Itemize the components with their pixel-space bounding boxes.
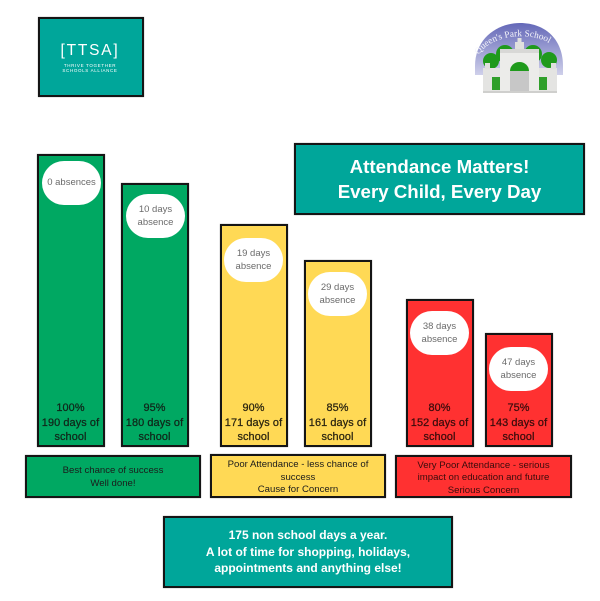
absence pill: [42, 160, 101, 204]
callout: non school days: [163, 516, 453, 588]
attendance figure: school: [502, 431, 535, 443]
logo: TTSA: [38, 17, 144, 97]
legend text: success: [281, 472, 315, 483]
absence pill: absence: [236, 260, 271, 272]
callout text: [206, 528, 410, 575]
bar: 90% attendance: [220, 224, 288, 447]
attendance figure: 161 days of: [309, 417, 366, 429]
absence pill: 47 days: [502, 356, 535, 368]
attendance figure: school: [54, 431, 87, 443]
absence pill: [489, 346, 548, 390]
attendance figure: school: [423, 431, 456, 443]
attendance figure: [411, 402, 468, 443]
legend: yellow band: [210, 454, 386, 498]
attendance figure: 95%: [143, 402, 166, 414]
legend text: Well done!: [90, 478, 136, 488]
attendance figure: [309, 402, 366, 443]
attendance figure: school: [138, 431, 171, 443]
legend: green band: [25, 455, 201, 498]
legend text: [63, 464, 164, 488]
attendance figure: school: [321, 431, 354, 443]
title panel: [294, 143, 585, 215]
logo: Queen's Park School: Queen's Park School: [475, 30, 552, 54]
legend: red band: [395, 455, 572, 498]
logo: Queen's Park School: [475, 23, 563, 93]
absence pill: [308, 272, 367, 316]
absence pill: [410, 310, 469, 354]
attendance figure: [42, 402, 100, 443]
bar: 75% attendance: [485, 333, 553, 447]
logo strapline: THRIVE TOGETHER: [64, 63, 116, 68]
title text: [338, 156, 542, 202]
legend text: Serious Concern: [448, 485, 519, 496]
attendance figure: 190 days of: [42, 417, 99, 429]
absence pill: [126, 194, 185, 238]
legend text: impact on education and future: [418, 472, 549, 483]
attendance figure: 180 days of: [126, 417, 183, 429]
bar: 100% attendance: [37, 154, 105, 447]
bar: 80% attendance: [406, 299, 474, 447]
absence pill: 38 days: [423, 320, 456, 332]
title text: Attendance Matters!: [350, 156, 529, 176]
absence pill: absence: [138, 216, 173, 228]
attendance figure: 171 days of: [225, 417, 282, 429]
attendance figure: 143 days of: [490, 417, 547, 429]
attendance figure: 85%: [326, 402, 349, 414]
absence pill: absence: [422, 334, 457, 344]
attendance figure: 100%: [56, 402, 85, 414]
attendance figure: 90%: [242, 402, 265, 414]
attendance figure: 152 days of: [411, 417, 468, 429]
absence pill: absence: [320, 294, 355, 306]
legend text: Very Poor Attendance - serious: [417, 460, 550, 471]
absence pill: 29 days: [321, 282, 354, 292]
attendance figure: 80%: [428, 402, 451, 414]
absence pill: 10 days: [139, 204, 172, 214]
attendance figure: [490, 402, 548, 443]
attendance figure: 75%: [507, 402, 530, 414]
absence pill: 0 absences: [47, 177, 96, 188]
logo strapline: [62, 63, 118, 73]
callout text: 175 non school days a year.: [229, 528, 387, 542]
legend text: Poor Attendance - less chance of: [228, 459, 368, 470]
absence pill: absence: [501, 370, 536, 380]
logo wordmark: [TTSA]: [60, 42, 120, 59]
absence pill: [224, 238, 283, 282]
attendance figure: school: [237, 431, 270, 443]
legend text: [228, 459, 368, 495]
legend text: [417, 460, 550, 496]
absence pill: 19 days: [237, 248, 270, 258]
bar: 85% attendance: [304, 260, 372, 447]
legend text: Best chance of success: [63, 464, 163, 476]
bar: 95% attendance: [121, 183, 189, 447]
legend text: Cause for Concern: [258, 484, 338, 495]
title text: Every Child, Every Day: [338, 181, 541, 202]
attendance figure: [225, 402, 282, 443]
attendance figure: [126, 402, 184, 443]
logo strapline: SCHOOLS ALLIANCE: [62, 68, 118, 73]
callout text: appointments and anything else!: [214, 561, 402, 575]
callout text: A lot of time for shopping, holidays,: [206, 545, 410, 559]
